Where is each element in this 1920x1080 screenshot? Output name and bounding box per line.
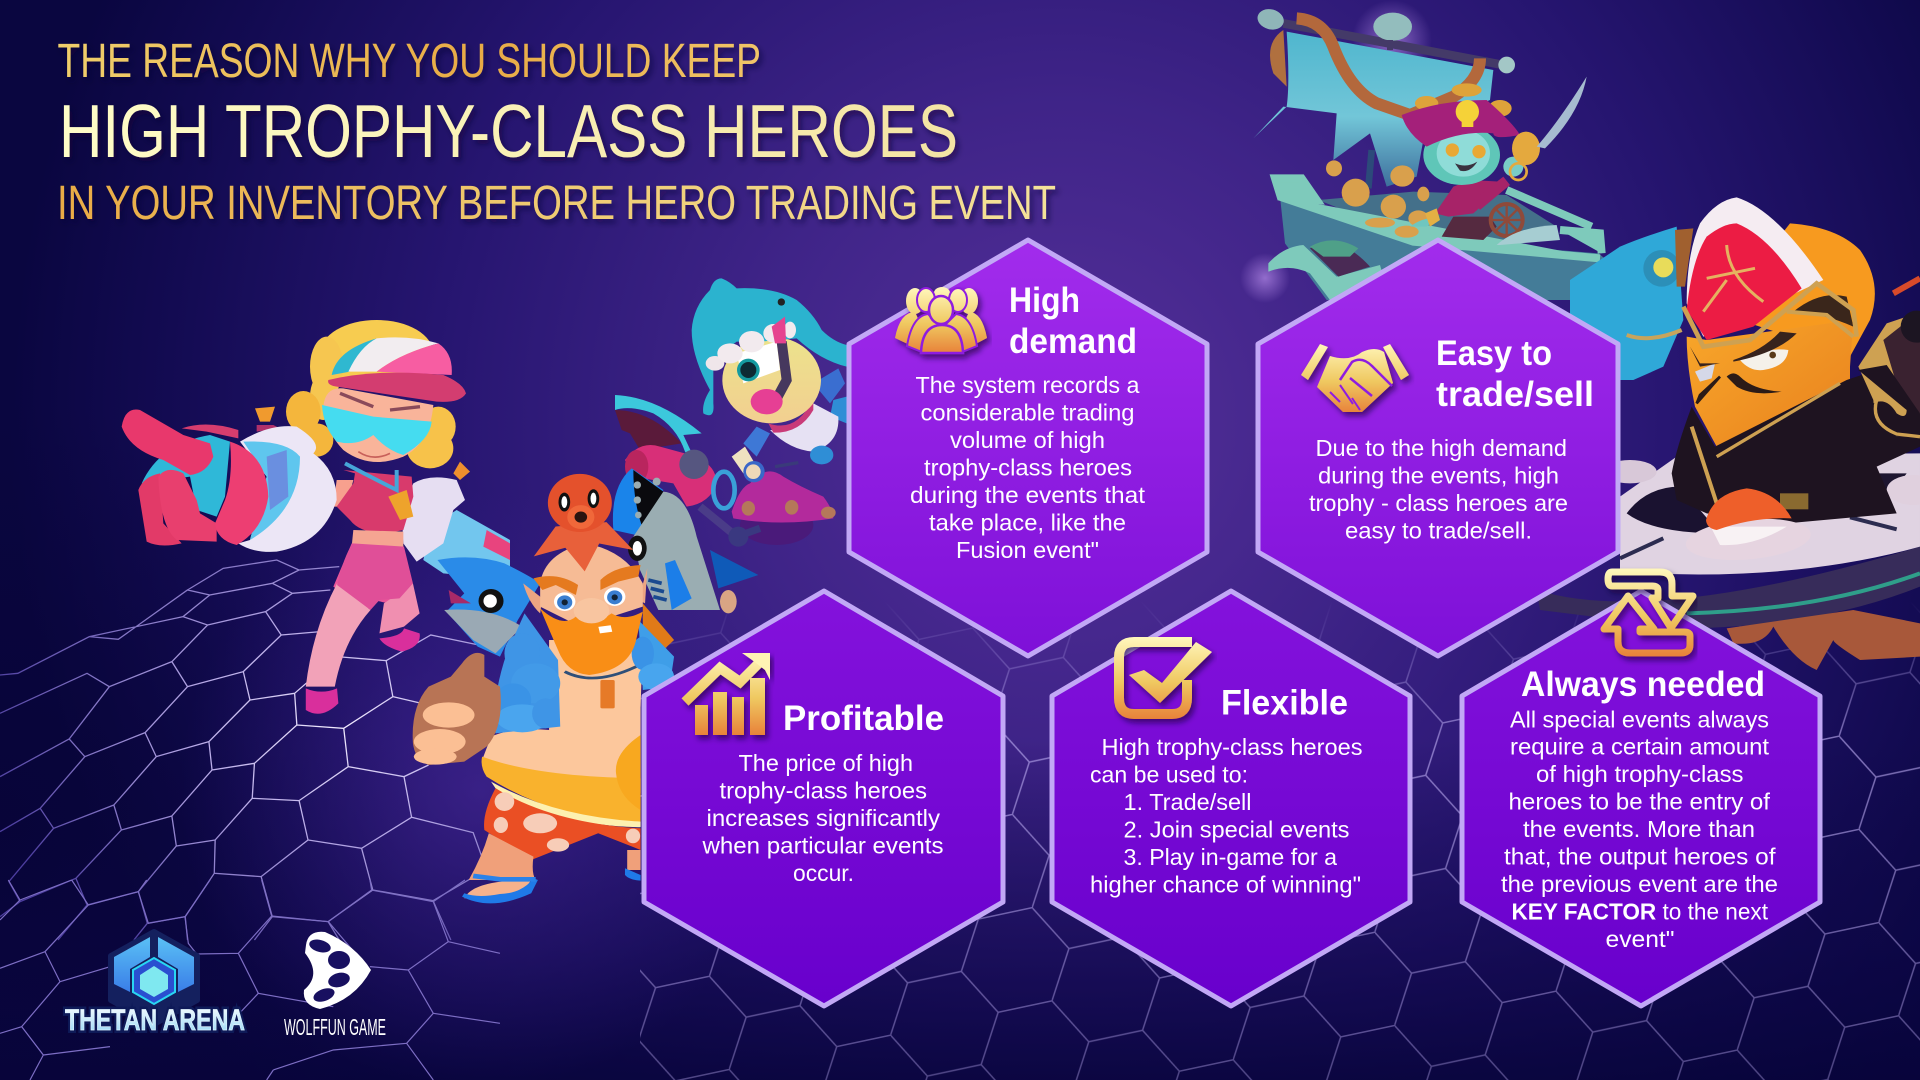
text: profitable body: increases significantly (706, 805, 941, 831)
title: HIGH TROPHY-CLASS HEROES (59, 89, 958, 173)
panel: easy to trade/sell (1258, 240, 1618, 656)
shorts (484, 788, 641, 860)
tentacles (1727, 610, 1920, 670)
hero: big shark costume (613, 468, 758, 613)
text: high demand body: trophy-class heroes (924, 454, 1132, 480)
text: always needed body: of high trophy-class (1536, 761, 1744, 787)
text: profitable body: when particular events (701, 832, 944, 858)
text: profitable body: trophy-class heroes (720, 778, 927, 804)
hull (1280, 197, 1615, 300)
text: high demand body (910, 372, 1146, 563)
text: easy to trade/sell body: during the events, high (1318, 462, 1559, 488)
illustration: left heroes (122, 278, 847, 903)
text: flexible body: 2. Join special events (1124, 816, 1350, 842)
orange head (1720, 223, 1875, 357)
heading: easy to trade/sell: Easy to (1436, 334, 1552, 373)
icon: swap arrows (1604, 572, 1693, 653)
panel: high demand: demand (1009, 322, 1137, 361)
text: high demand body: Fusion event" (956, 537, 1099, 563)
text: flexible body: higher chance of winning" (1090, 872, 1361, 898)
heading: flexible: Flexible (1221, 684, 1348, 722)
panel: high demand (849, 240, 1207, 656)
towel (495, 613, 560, 733)
logo: wolffun game (284, 932, 386, 1040)
icon: group of people (895, 287, 987, 353)
hexagon: high demand (849, 240, 1207, 656)
text: flexible body: 1. Trade/sell (1124, 789, 1252, 815)
title: THE REASON WHY YOU SHOULD KEEP (58, 35, 761, 88)
hexagon: easy to trade/sell (1258, 240, 1618, 656)
icon: check box (1119, 642, 1212, 714)
blue creature (1570, 227, 1683, 380)
hero: girl with water gun (upper body) (122, 320, 510, 610)
text: always needed body: require a certain amount (1510, 734, 1770, 760)
side plates (1603, 460, 1657, 483)
title (57, 35, 1056, 230)
robe (1672, 367, 1920, 523)
text: profitable body: occur. (793, 860, 854, 886)
hero: girl legs (306, 543, 420, 714)
panel: easy to trade/sell: trade/sell (1436, 375, 1594, 414)
hero: small blue shark (437, 557, 540, 657)
heading: high demand: High (1009, 281, 1080, 320)
text: flexible body: High trophy-class heroes (1102, 734, 1362, 760)
text: profitable body: The price of high (738, 750, 913, 776)
text: always needed body: that, the output heroes of (1504, 844, 1776, 870)
hero: shark hood creature (692, 278, 847, 473)
text: high demand body: volume of high (950, 427, 1105, 453)
text: flexible body (1090, 734, 1362, 898)
text: easy to trade/sell body (1309, 435, 1568, 544)
logo: wolffun game: WOLFFUN GAME (284, 1014, 386, 1040)
hero: bearded man (413, 543, 674, 903)
hexagon: profitable (644, 591, 1003, 1006)
logo: thetan arena: THETAN ARENA (65, 1004, 245, 1037)
cannon (1858, 317, 1920, 437)
panel: always needed (1462, 572, 1820, 1006)
heading: profitable: Profitable (783, 699, 944, 738)
text: easy to trade/sell body: trophy - class heroes are (1309, 490, 1568, 516)
text: easy to trade/sell body: easy to trade/sell. (1345, 518, 1532, 544)
logo: thetan arena (65, 932, 245, 1037)
hexagon: always needed (1462, 591, 1820, 1006)
text: always needed body: the events. More than (1523, 816, 1755, 842)
text: always needed body (1501, 706, 1778, 952)
float (482, 757, 641, 827)
illustration: sushi octopus hero (1537, 197, 1920, 670)
text: easy to trade/sell body: Due to the high demand (1316, 435, 1567, 461)
hero: shark gun (615, 395, 760, 547)
icon: handshake (1301, 344, 1409, 412)
hat (1687, 197, 1823, 337)
text: always needed body: KEY FACTOR to the next (1512, 898, 1769, 924)
hand (413, 653, 501, 765)
flag (1253, 32, 1493, 187)
text: profitable body (701, 750, 944, 886)
illustration: pirate hero on ship (1253, 6, 1615, 300)
panel: profitable (644, 591, 1003, 1006)
table (1537, 547, 1920, 628)
logo: thetan arena: THETAN ARENA (65, 1004, 245, 1037)
text: always needed body: the previous event are the (1501, 871, 1778, 897)
text: high demand body: take place, like the (929, 510, 1126, 536)
legs and sandals (469, 833, 536, 880)
heading: always needed: Always needed (1521, 665, 1765, 704)
panel: flexible (1052, 591, 1410, 1006)
head (523, 583, 542, 613)
sushi (1684, 514, 1813, 565)
text: high demand body: during the events that (910, 482, 1146, 508)
icon: rising chart (685, 653, 770, 735)
title: IN YOUR INVENTORY BEFORE HERO TRADING EVENT (57, 177, 1056, 230)
text: always needed body: event" (1606, 926, 1674, 952)
hexagon: flexible (1052, 591, 1410, 1006)
text: flexible body: 3. Play in-game for a (1124, 844, 1337, 870)
pirate (1442, 217, 1497, 240)
text: flexible body: can be used to: (1090, 762, 1248, 788)
text: high demand body: The system records a (916, 372, 1140, 398)
coins (1326, 160, 1342, 176)
hero: red octopus (534, 474, 633, 571)
text: always needed body: All special events always (1510, 706, 1769, 732)
text: high demand body: considerable trading (920, 400, 1134, 426)
face (1740, 349, 1788, 370)
text: always needed body: heroes to be the entry of (1508, 788, 1771, 814)
hero: purple ufo (732, 461, 836, 545)
